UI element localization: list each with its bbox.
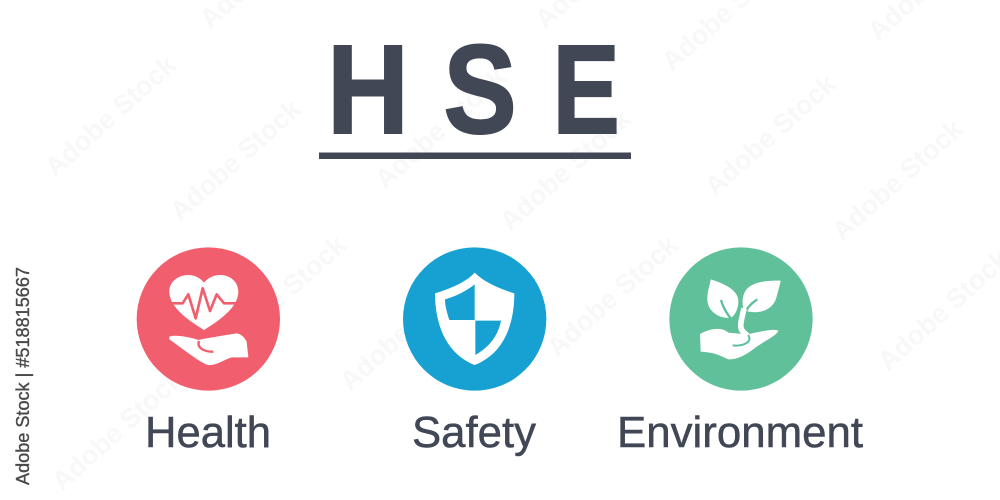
title underline	[319, 152, 631, 159]
infographic canvas: Adobe Stock	[699, 68, 842, 201]
title: HSE: E	[552, 20, 620, 161]
infographic canvas: Adobe Stock	[46, 363, 189, 496]
label: Safety: Safety	[412, 408, 536, 457]
infographic canvas: Adobe Stock	[494, 103, 637, 236]
icon: environment circle with plant and hand	[669, 247, 813, 391]
vertical stock credit: Adobe Stock | #518815667	[13, 267, 33, 485]
infographic canvas: Adobe Stock	[369, 61, 512, 194]
infographic canvas: Adobe Stock	[164, 93, 307, 226]
infographic canvas: Adobe Stock	[541, 229, 684, 362]
infographic canvas: Adobe Stock	[334, 263, 477, 396]
title: HSE	[327, 19, 620, 161]
icon: health circle with heart and hand	[137, 247, 280, 391]
title: HSE: H	[327, 19, 409, 160]
label: Health: Health	[145, 408, 271, 457]
title: HSE: S	[444, 20, 517, 161]
infographic canvas: Adobe Stock	[826, 113, 969, 246]
infographic canvas: Adobe Stock	[39, 49, 182, 182]
label: Environment: Environment	[617, 408, 863, 457]
infographic canvas: Adobe Stock	[209, 229, 352, 362]
icon: safety circle with shield	[403, 247, 546, 391]
